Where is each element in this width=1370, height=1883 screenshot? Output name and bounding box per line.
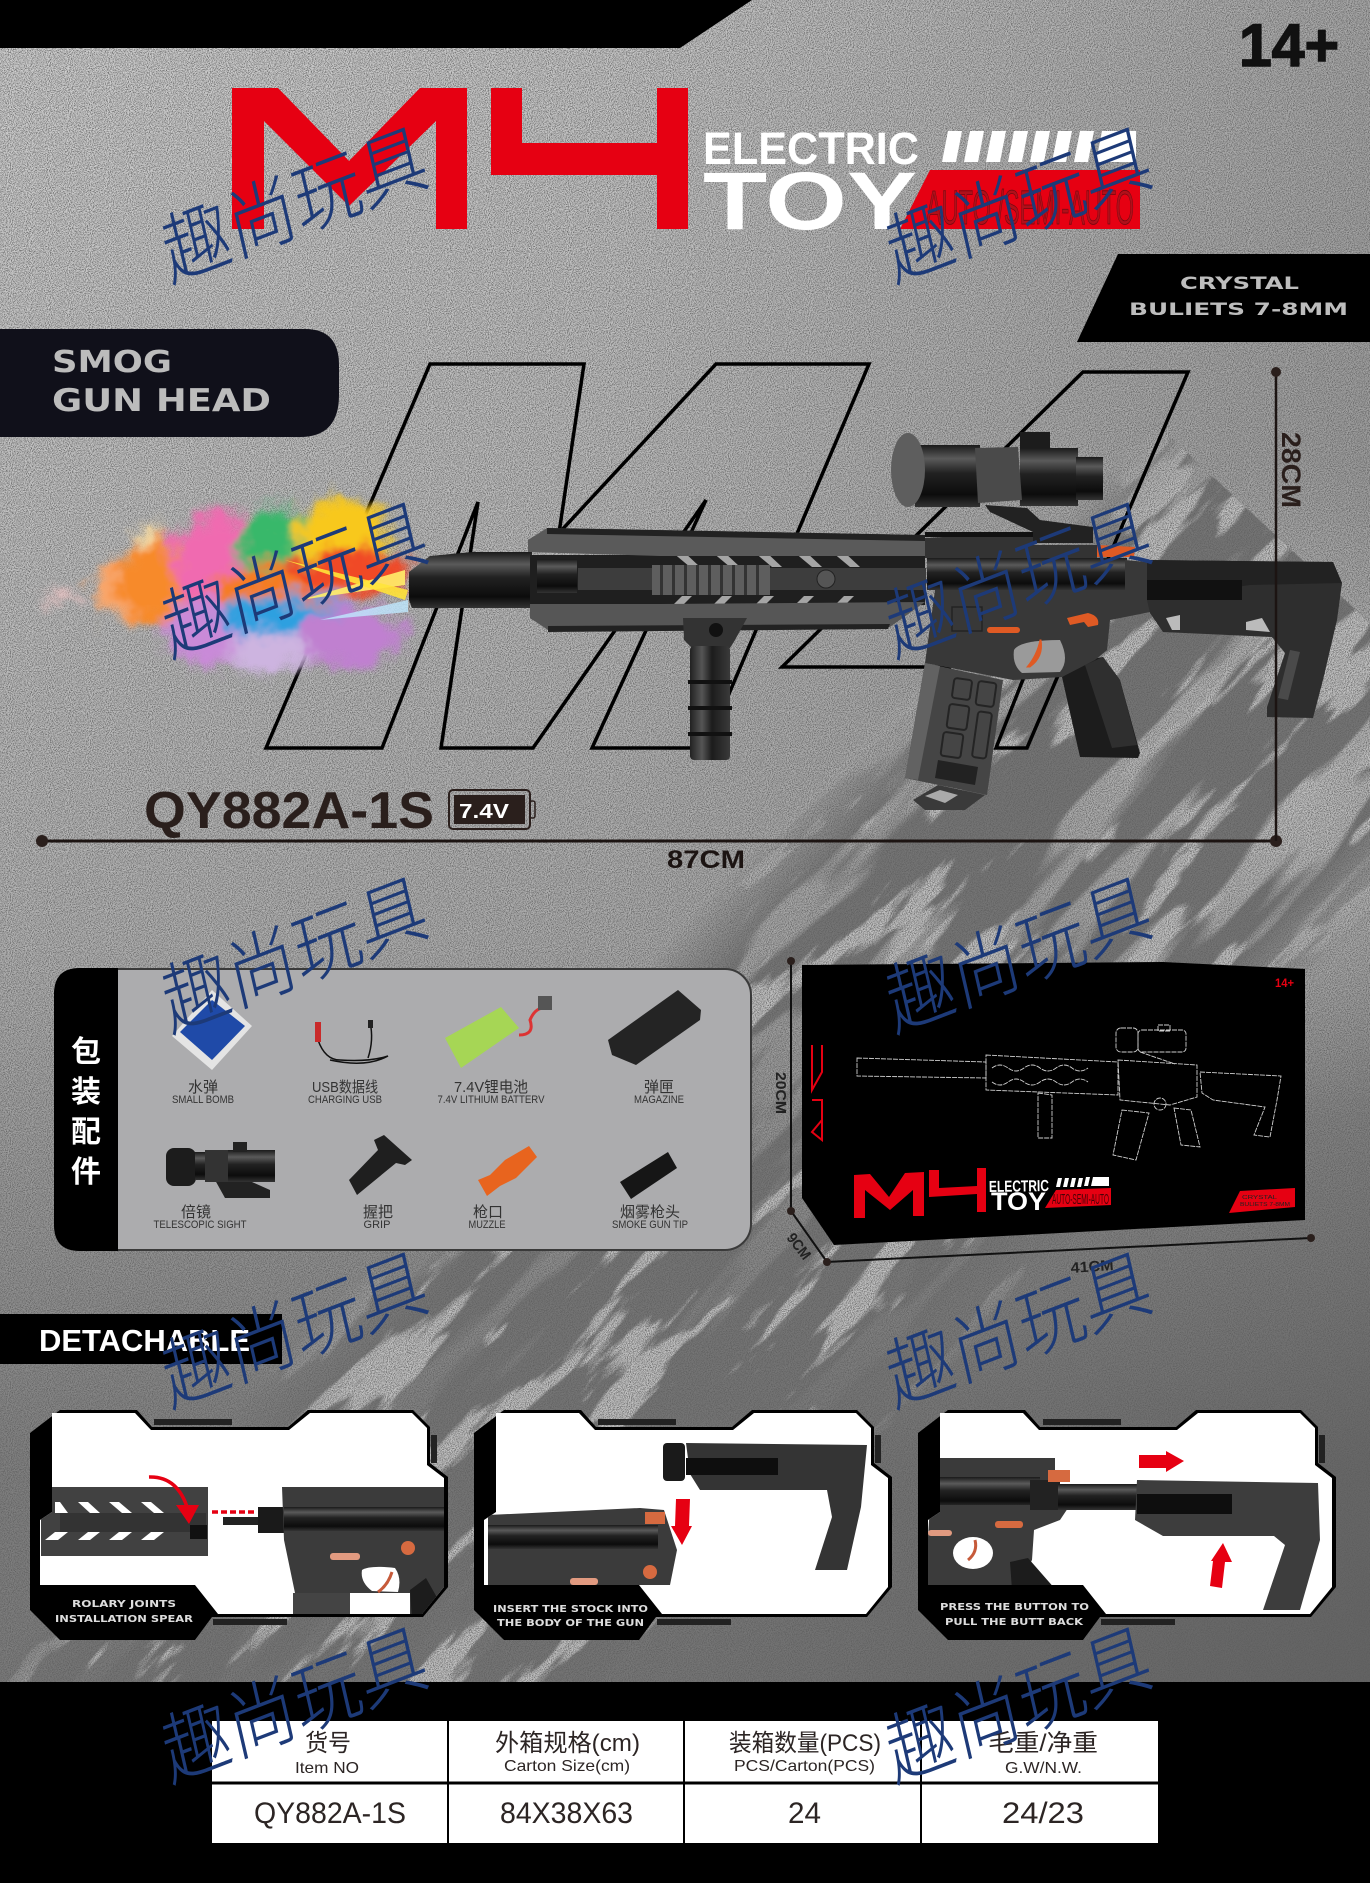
label: telescopic sight: TELESCOPIC SIGHT: [154, 1219, 247, 1231]
label: smog gun head: [0, 329, 339, 437]
title: M4 logo: [232, 88, 1140, 247]
caption: INSERT THE STOCK INTO: [493, 1604, 648, 1615]
icon: smoke gun tip: [620, 1152, 677, 1199]
box gun line drawing: [857, 1025, 1281, 1160]
big outlined M4 behind gun: [266, 364, 1188, 748]
dimension: 28CM height: 28CM: [1276, 432, 1306, 508]
table: item specifications: [212, 1721, 1158, 1843]
logo red badge AUTO/SEMI-AUTO: AUTO /SEMI-AUTO: [926, 182, 1134, 235]
label: lithium battery: [438, 1079, 545, 1106]
side heading 包装配件: [54, 968, 118, 1251]
logo text TOY: TOY: [703, 156, 917, 247]
column: carton size: 外箱规格(cm): [495, 1730, 640, 1757]
dimension: 87CM width: [36, 835, 1282, 874]
caption: THE BODY OF THE GUN: [497, 1618, 644, 1629]
label: muzzle: 枪口: [473, 1204, 503, 1221]
dimension: 28CM height: [1271, 367, 1306, 841]
logo white stripes: [942, 131, 1136, 162]
label: small bomb: 水弹: [188, 1079, 218, 1096]
label: muzzle: MUZZLE: [468, 1219, 506, 1231]
box dimension lines: [791, 961, 1311, 1262]
battery icon 7.4V: 7.4V: [459, 801, 510, 823]
logo text ELECTRIC: ELECTRIC: [703, 123, 919, 174]
upper and lower receiver: [925, 532, 1150, 680]
arrow: red down arrow: [671, 1499, 692, 1545]
logo letter M: [232, 88, 467, 229]
box corner red tag: BULIETS 7-8MM: [1240, 1202, 1290, 1208]
label: magazine: [634, 1079, 684, 1106]
column: weight: 24/23: [1002, 1797, 1084, 1830]
caption: PRESS THE BUTTON TO: [940, 1602, 1089, 1613]
label: smog gun head: GUN HEAD: [52, 383, 271, 419]
caption: ROLARY JOINTS: [72, 1599, 176, 1610]
label: smoke gun tip: [612, 1204, 688, 1231]
watermark: repeated brand text: 趣尚玩具: [878, 488, 1159, 673]
heading: detachable: DETACHABLE: [39, 1323, 250, 1358]
caption: PULL THE BUTT BACK: [945, 1617, 1084, 1628]
scope: [891, 432, 1103, 543]
box text TOY: TOY: [991, 1188, 1046, 1216]
box corner red tag: CRYSTAL: [1242, 1195, 1277, 1201]
box M4 logo: [854, 1168, 986, 1218]
callout: crystal bullets: [1077, 254, 1370, 342]
icon: orange muzzle: [478, 1146, 537, 1196]
column: item number: 货号: [305, 1730, 351, 1757]
column: item number: [254, 1730, 406, 1830]
column: carton size: 84X38X63: [500, 1797, 633, 1830]
label: telescopic sight: [154, 1203, 247, 1231]
logo red badge AUTO/SEMI-AUTO: [900, 170, 1140, 235]
side heading 包装配件: 件: [71, 1156, 101, 1189]
label: charging usb: CHARGING USB: [308, 1094, 382, 1106]
watermark: repeated brand text: 趣尚玩具: [878, 1613, 1159, 1798]
bottom black band: [0, 1682, 1370, 1883]
heading: detachable: [0, 1314, 282, 1364]
watermark: repeated brand text: 趣尚玩具: [154, 1613, 435, 1798]
dimension: 87CM width: 87CM: [667, 846, 745, 874]
arrow: red curved rotate arrow: [149, 1477, 199, 1524]
box side logo: [812, 1045, 822, 1140]
box black body: [802, 962, 1305, 1245]
logo letter 4: [491, 88, 688, 229]
caption: INSTALLATION SPEAR: [55, 1614, 193, 1625]
caption: [55, 1599, 193, 1625]
pistol grip: [1062, 657, 1140, 758]
watermark: repeated brand text: [154, 113, 1159, 1798]
age mark 14+: 14+: [1239, 12, 1339, 79]
watermark: repeated brand text: 趣尚玩具: [878, 113, 1159, 298]
label: small bomb: SMALL BOMB: [172, 1094, 234, 1106]
label: grip: GRIP: [364, 1219, 390, 1231]
arrow: red right arrow: [1139, 1451, 1184, 1472]
column: pieces per carton: PCS/Carton(PCS): [734, 1758, 875, 1775]
handguard: [528, 528, 926, 632]
panel: press button to pull butt back: [918, 1410, 1336, 1640]
label: grip: 握把: [363, 1204, 393, 1221]
dimension: 9CM: 9CM: [783, 1230, 814, 1263]
magazine: [905, 663, 1003, 810]
product: toy gun with scope and grip: [409, 432, 1342, 810]
box red badge: [1045, 1188, 1111, 1208]
callout: crystal bullets: BULIETS 7-8MM: [1129, 300, 1348, 320]
column: item number: QY882A-1S: [254, 1797, 406, 1830]
column: item number: Item NO: [295, 1760, 359, 1777]
label: magazine: 弹匣: [644, 1079, 674, 1096]
top black banner: [0, 0, 752, 48]
icon: green lithium battery: [445, 996, 552, 1068]
column: weight: G.W/N.W.: [1005, 1760, 1082, 1777]
notch stripes: [1043, 1419, 1325, 1625]
icon: water beads bag: [172, 990, 252, 1070]
caption: [940, 1602, 1089, 1628]
side heading 包装配件: 配: [71, 1116, 101, 1149]
watermark: repeated brand text: 趣尚玩具: [154, 113, 435, 298]
column: weight: 毛重/净重: [988, 1730, 1098, 1757]
panel: rotary joints installation: [30, 1410, 448, 1640]
column: carton size: Carton Size(cm): [504, 1758, 630, 1775]
orange pins and trigger: [987, 545, 1135, 667]
illustration: handguard and receiver: [41, 1487, 445, 1620]
column: pieces per carton: 24: [788, 1797, 821, 1830]
callout: crystal bullets: CRYSTAL: [1180, 274, 1299, 294]
suppressor: [409, 552, 532, 608]
panel: package accessories: [54, 968, 751, 1251]
label: lithium battery: 7.4V LITHIUM BATTERV: [438, 1094, 545, 1106]
product box with dimensions: [772, 957, 1315, 1277]
side heading 包装配件: 包: [71, 1036, 101, 1069]
icon: magazine: [608, 990, 701, 1065]
label: muzzle: [468, 1204, 506, 1231]
watermark: repeated brand text: 趣尚玩具: [154, 1238, 435, 1423]
label: charging usb: [308, 1079, 382, 1106]
icon: telescopic sight: [166, 1142, 275, 1198]
watermark: repeated brand text: 趣尚玩具: [154, 863, 435, 1048]
watermark: repeated brand text: 趣尚玩具: [878, 1238, 1159, 1423]
notch stripes: [598, 1419, 881, 1625]
column: pieces per carton: [729, 1730, 881, 1830]
product box with dimensions: AUTO-SEMI-AUTO: [1052, 1191, 1109, 1208]
column: carton size: [495, 1730, 640, 1830]
box stripes: [1056, 1177, 1109, 1187]
box age mark: 14+: [1275, 976, 1294, 990]
box corner red tag: [1229, 1188, 1295, 1213]
label: small bomb: [172, 1079, 234, 1106]
icon: usb cable: [315, 1020, 388, 1063]
illustration: extended stock: [925, 1458, 1320, 1610]
smoke cloud: rainbow powder burst: [44, 499, 410, 672]
arrow: red dotted guide: [212, 1510, 255, 1514]
column: pieces per carton: 装箱数量(PCS): [729, 1730, 881, 1757]
column: weight: [988, 1730, 1098, 1830]
label: charging usb: USB数据线: [312, 1079, 378, 1096]
label: smoke gun tip: 烟雾枪头: [620, 1204, 680, 1221]
battery icon 7.4V: [449, 790, 535, 829]
side heading 包装配件: 装: [71, 1076, 101, 1109]
icon: foregrip: [349, 1135, 412, 1195]
notch stripes: [154, 1419, 437, 1625]
label: grip: [363, 1204, 393, 1231]
watermark: repeated brand text: 趣尚玩具: [878, 863, 1159, 1048]
label: smoke gun tip: SMOKE GUN TIP: [612, 1219, 688, 1231]
dimension: 20CM: 20CM: [772, 1072, 789, 1114]
illustration: stock and receiver: [488, 1443, 867, 1585]
label: smog gun head: SMOG: [52, 345, 172, 380]
label: magazine: MAGAZINE: [634, 1094, 684, 1106]
stock: [1147, 560, 1342, 718]
model number with battery badge: QY882A-1S: [144, 782, 434, 840]
dimension: 41CM: 41CM: [1070, 1257, 1114, 1277]
label: telescopic sight: 倍镜: [181, 1203, 211, 1221]
vertical foregrip: [683, 618, 747, 760]
label: lithium battery: 7.4V锂电池: [454, 1079, 528, 1096]
caption: [493, 1604, 648, 1629]
panel: insert the stock: [474, 1410, 892, 1640]
arrow: red up arrow: [1210, 1543, 1232, 1588]
watermark: repeated brand text: 趣尚玩具: [154, 488, 435, 673]
box text ELECTRIC: ELECTRIC: [989, 1178, 1049, 1196]
